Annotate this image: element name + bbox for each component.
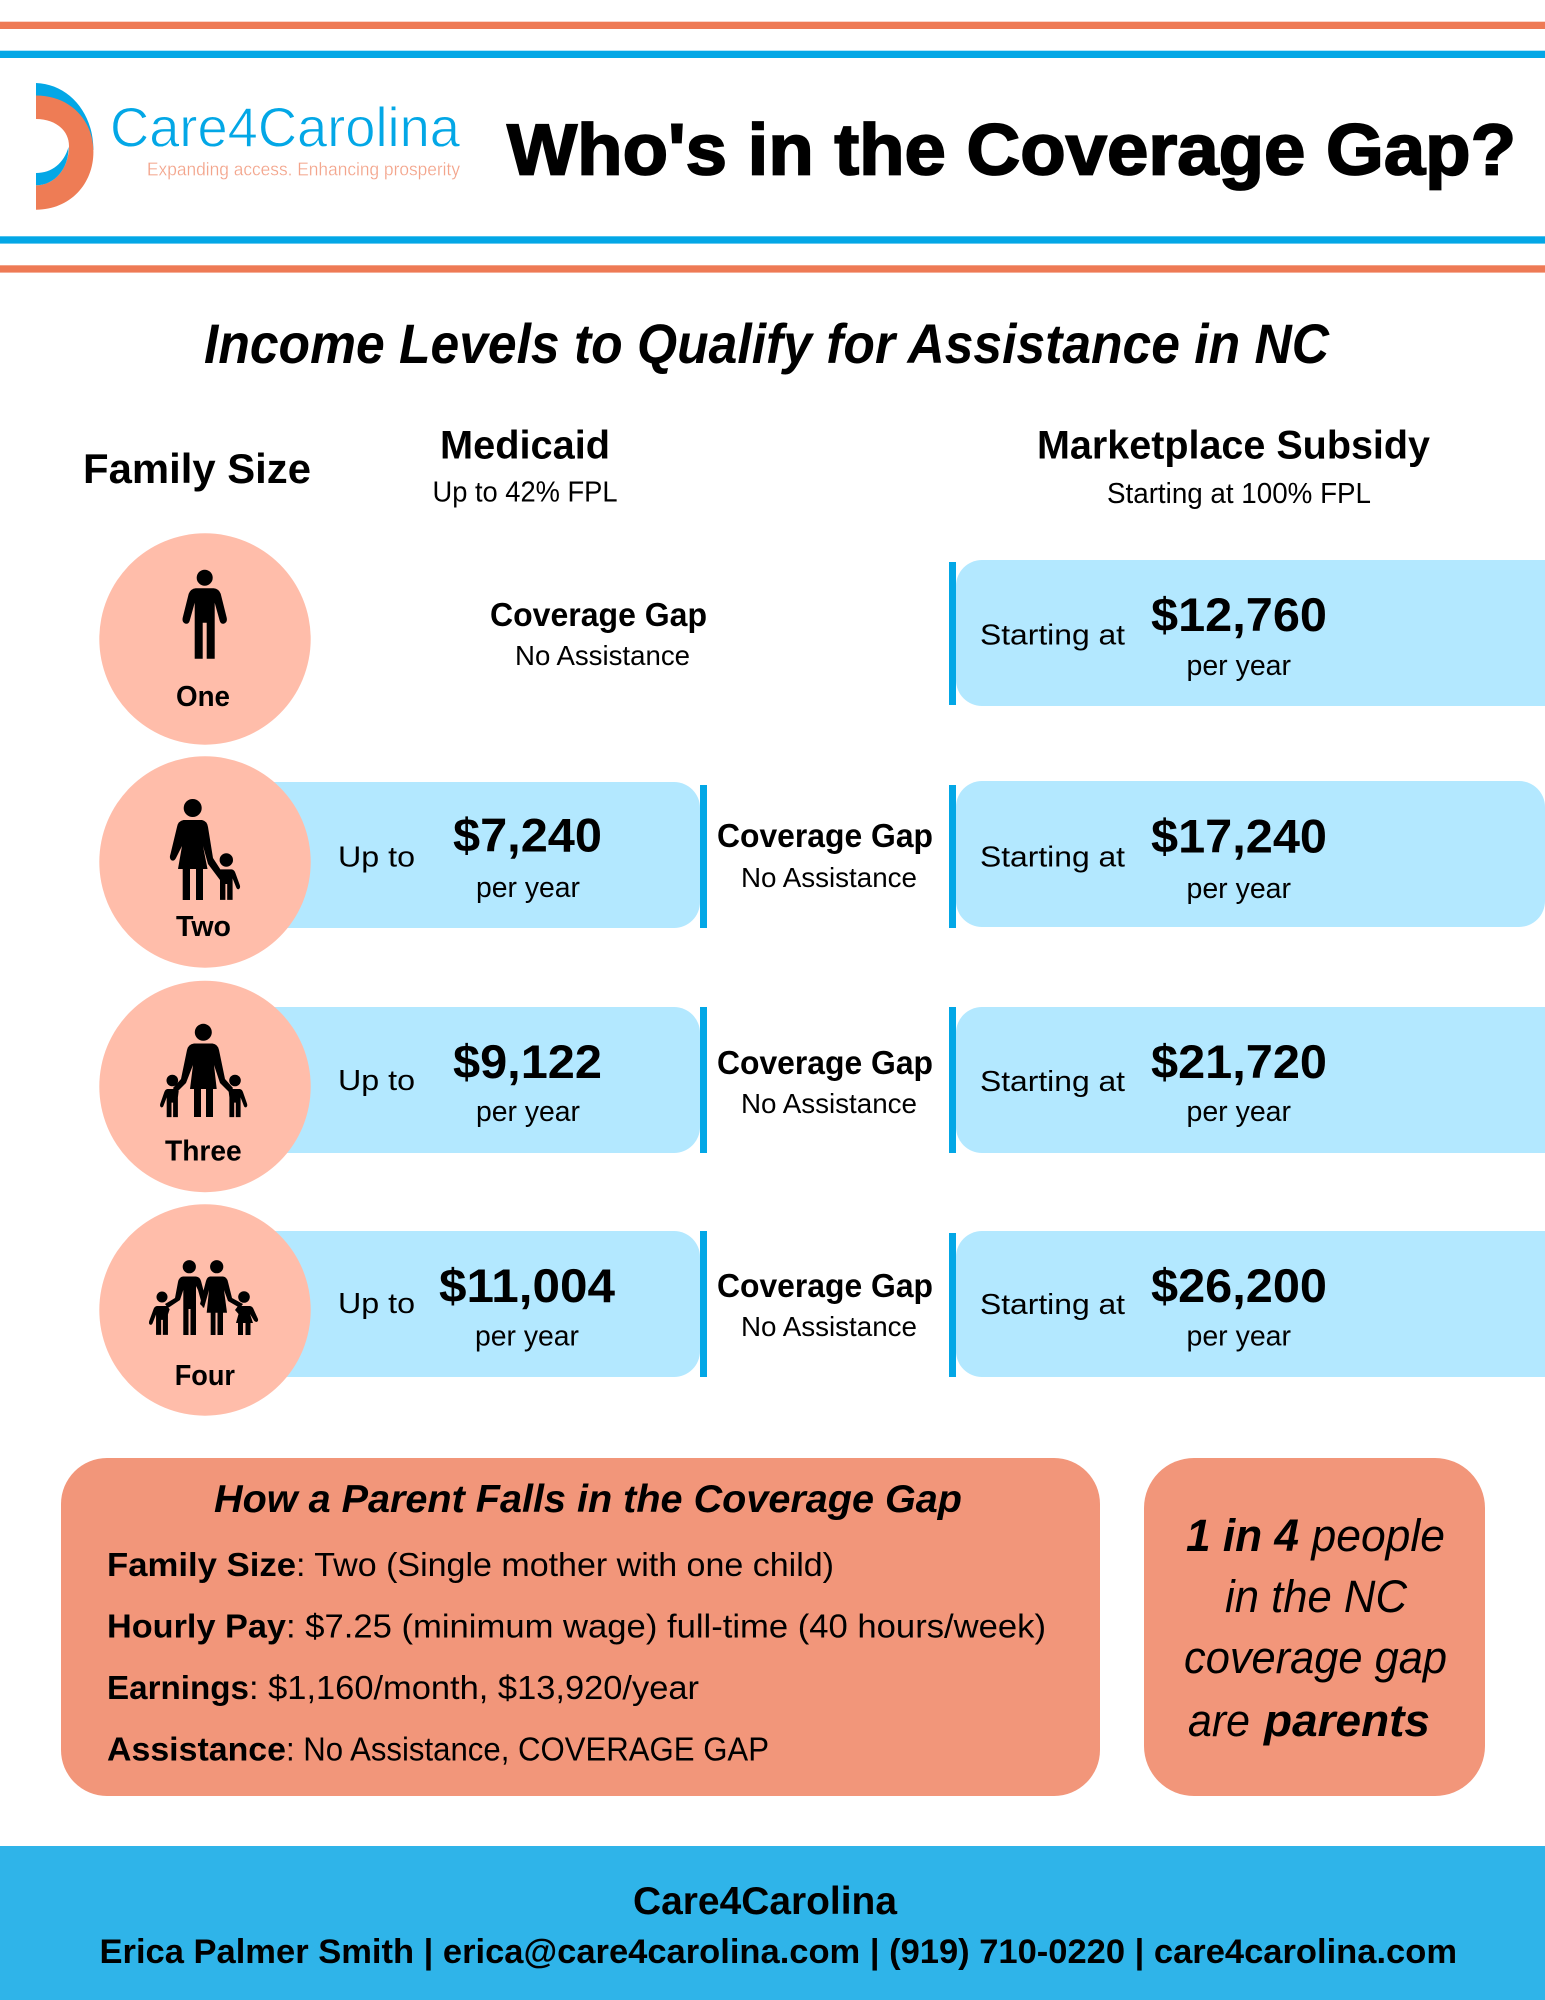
column heading: Medicaid: Medicaid: [440, 424, 610, 468]
coverage gap label: No Assistance: [515, 640, 690, 671]
column heading: Medicaid: [432, 424, 618, 508]
panel: 1 in 4 callout: parents: [1263, 1695, 1430, 1746]
footer contact line: Erica Palmer Smith | erica@care4carolina.com | (919) 710-0220 | care4carolina.com: [100, 1933, 1457, 1971]
panel: 1 in 4 callout: coverage gap: [1184, 1632, 1447, 1683]
column heading: Medicaid: Up to 42% FPL: [432, 476, 618, 508]
logo tagline: Expanding access. Enhancing prosperity: [147, 158, 461, 180]
coverage gap label: [717, 817, 933, 893]
coverage gap label: Coverage Gap: [717, 817, 933, 854]
Medicaid bar: Up to: [338, 1065, 415, 1097]
Medicaid bar: [230, 782, 707, 928]
column heading: Marketplace Subsidy: [1037, 424, 1431, 510]
row: family of four: [99, 1204, 1545, 1416]
detail: family size: : Two (Single mother with one child): [296, 1546, 834, 1583]
Medicaid bar: Up to: [338, 842, 415, 874]
marketplace bar: [949, 781, 1545, 928]
Medicaid bar: $9,122: [453, 1035, 602, 1088]
marketplace bar: Starting at: [980, 842, 1125, 874]
coverage gap label: [717, 1267, 933, 1342]
circle: three: Three: [165, 1136, 242, 1168]
Medicaid bar: $7,240: [453, 808, 602, 862]
marketplace bar: $12,760: [1151, 588, 1327, 641]
detail: earnings: Earnings: [107, 1669, 249, 1706]
coverage gap label: Coverage Gap: [717, 1044, 933, 1081]
panel: 1 in 4 callout: 1 in 4: [1186, 1510, 1299, 1561]
logo: Care4Carolina: [36, 83, 461, 210]
row: family of one: [99, 533, 1545, 745]
marketplace bar: Starting at: [980, 1289, 1125, 1321]
marketplace bar: per year: [1186, 650, 1291, 682]
coverage gap label: Coverage Gap: [490, 596, 707, 633]
footer name: Care4Carolina: [633, 1880, 897, 1923]
circle: three: [99, 981, 311, 1192]
coverage gap label: No Assistance: [741, 862, 917, 893]
panel: 1 in 4 callout: in the NC: [1225, 1571, 1407, 1622]
detail: hourly pay: : $7.25 (minimum wage) full-time (40 hours/week): [286, 1608, 1046, 1644]
coverage gap label: No Assistance: [741, 1088, 917, 1119]
coverage gap label: No Assistance: [741, 1311, 917, 1342]
detail: assistance: : No Assistance, COVERAGE GAP: [286, 1730, 769, 1768]
Medicaid bar: [230, 1007, 707, 1153]
Medicaid bar: [230, 1231, 707, 1377]
marketplace bar: per year: [1186, 1320, 1291, 1352]
column heading: family size: Family Size: [83, 445, 311, 492]
row: family of three: [99, 981, 1545, 1192]
column heading: Marketplace Subsidy: Starting at 100% FPL: [1107, 478, 1371, 510]
title: Who's in the Coverage Gap?: [507, 110, 1516, 190]
icon: logo crescent: [36, 83, 93, 210]
column heading: Marketplace Subsidy: Marketplace Subsidy: [1037, 424, 1431, 468]
detail: assistance: Assistance: [107, 1730, 286, 1768]
detail: assistance: [107, 1730, 769, 1768]
marketplace bar: [949, 560, 1545, 706]
Medicaid bar: per year: [476, 872, 580, 904]
panel heading: How a Parent Falls in the Coverage Gap: [214, 1478, 962, 1521]
Medicaid bar: per year: [475, 1320, 579, 1352]
marketplace bar: Starting at: [980, 1066, 1125, 1098]
panel: 1 in 4 callout: are: [1188, 1695, 1250, 1746]
subtitle: Income Levels to Qualify for Assistance in NC: [204, 312, 1330, 375]
circle: four: Four: [175, 1360, 235, 1392]
detail: hourly pay: Hourly Pay: [107, 1608, 287, 1644]
marketplace bar: per year: [1186, 1096, 1291, 1128]
panel: 1 in 4 callout: [1144, 1458, 1485, 1796]
marketplace bar: Starting at: [980, 620, 1125, 652]
marketplace bar: $21,720: [1151, 1035, 1327, 1088]
row: family of two: [99, 756, 1545, 968]
detail: family size: Family Size: [107, 1546, 296, 1583]
marketplace bar: [949, 1231, 1545, 1377]
marketplace bar: per year: [1186, 873, 1291, 905]
circle: two: [99, 756, 311, 968]
detail: earnings: : $1,160/month, $13,920/year: [249, 1669, 699, 1706]
marketplace bar: $26,200: [1151, 1259, 1327, 1312]
marketplace bar: [949, 1007, 1545, 1153]
marketplace bar: $17,240: [1151, 810, 1327, 862]
Medicaid bar: $11,004: [439, 1259, 615, 1312]
coverage gap label: Coverage Gap: [717, 1267, 933, 1304]
panel: 1 in 4 callout: people: [1310, 1510, 1445, 1561]
panel: how a parent falls in the coverage gap: [61, 1458, 1100, 1796]
circle: one: One: [176, 681, 230, 713]
coverage gap label: [717, 1044, 933, 1119]
circle: two: Two: [176, 911, 231, 943]
Medicaid bar: per year: [476, 1096, 580, 1128]
footer: [0, 1846, 1545, 2000]
circle: four: [99, 1204, 311, 1416]
circle: one: [99, 533, 311, 745]
coverage gap label: [490, 596, 707, 671]
Medicaid bar: Up to: [338, 1288, 415, 1320]
logo wordmark: Care4Carolina: [110, 96, 461, 159]
